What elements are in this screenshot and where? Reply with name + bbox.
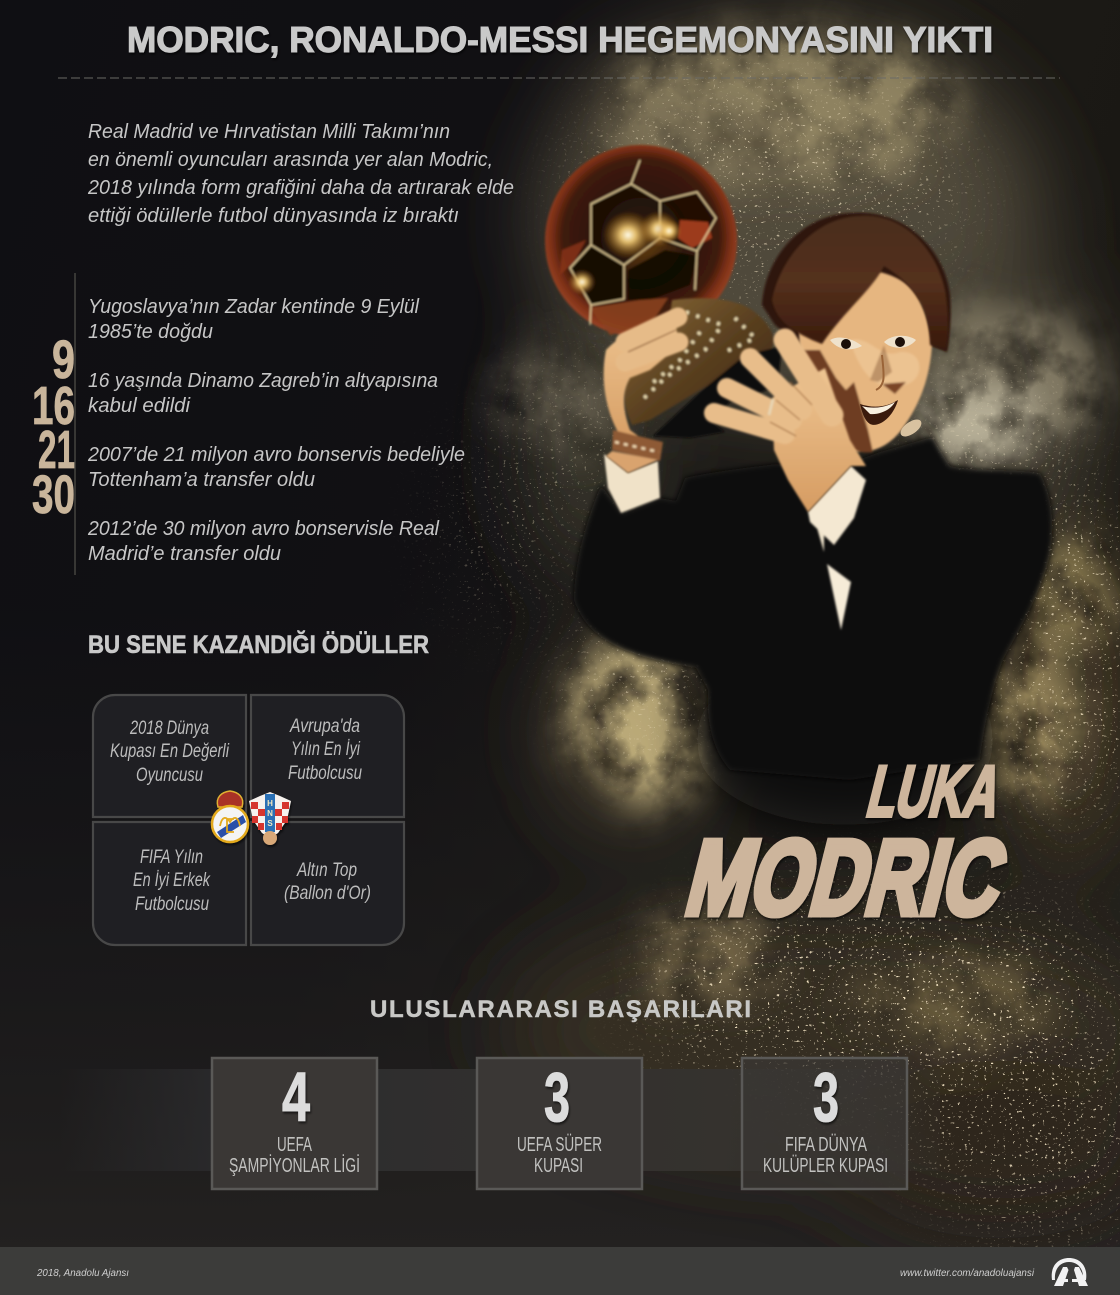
stat: Club World Cup: 3 [813,1058,839,1136]
key numbers: 30 [32,465,75,525]
timeline [32,273,465,575]
twitter url: www.twitter.com/anadoluajansi [900,1268,1035,1279]
award: Europe player of the year: Futbolcusu [288,763,362,784]
stat: Champions League: UEFA [277,1134,312,1156]
stat: Club World Cup [742,1058,907,1189]
title divider [58,77,1060,79]
award: Europe player of the year [251,695,404,817]
shirt and cuff [604,454,866,630]
eyes and mouth [830,336,916,425]
timeline text: 2012’de 30 milyon avro bonservisle Real [87,518,440,540]
icon: Real Madrid crest [212,791,248,842]
photo: Luka Modric holding Ballon d'Or [545,145,1052,825]
icon: Croatia federation crest: S [267,819,273,828]
stat: Super Cup [477,1058,642,1189]
stat: Super Cup: UEFA SÜPER [517,1134,602,1156]
timeline text [87,296,465,565]
timeline text: 1985’te doğdu [88,321,213,343]
raised hand [714,340,866,512]
award: world cup MVP [93,695,246,817]
icon: Croatia federation crest: H [267,799,273,808]
award: FIFA best player: FIFA Yılın [140,847,203,868]
achievements band [60,1069,940,1171]
award: Europe player of the year: Yılın En İyi [291,739,361,760]
trophy ball [545,145,737,337]
stat: Champions League [212,1058,377,1189]
smoke clouds [500,40,1115,1045]
award: world cup MVP: 2018 Dünya [129,718,209,739]
footer bar [0,1247,1120,1295]
award: Ballon d'Or [251,822,404,945]
timeline text: 16 yaşında Dinamo Zagreb’in altyapısına [88,370,438,392]
award: Ballon d'Or: Altın Top [296,860,357,881]
intro text: Real Madrid ve Hırvatistan Milli Takımı’nın [88,121,450,143]
icon: Anadolu Agency logo [1052,1258,1088,1286]
key numbers: 16 [32,376,75,436]
award: FIFA best player: En İyi Erkek [133,870,211,891]
award: Europe player of the year: Avrupa'da [289,716,360,737]
intro text: en önemli oyuncuları arasında yer alan Modric, [88,149,493,171]
heading: international achievements: ULUSLARARASI BAŞARILARI [370,996,751,1023]
intro text: ettiği ödüllerle futbol dünyasında iz bıraktı [88,205,459,227]
stat: Club World Cup: FIFA DÜNYA [785,1134,867,1156]
hair back [762,213,951,352]
award: FIFA best player: Futbolcusu [135,894,209,915]
timeline text: Tottenham’a transfer oldu [88,469,315,491]
face [799,272,932,452]
name: Luka Modric [676,752,1018,937]
earpiece mic [898,416,924,440]
award: Ballon d'Or: (Ballon d'Or) [284,883,371,904]
heading: awards: BU SENE KAZANDIĞI ÖDÜLLER [88,630,429,659]
intro text: 2018 yılında form grafiğini daha da artırarak elde [87,177,514,199]
key numbers [32,330,75,525]
award: world cup MVP: Kupası En Değerli [110,741,230,762]
award: FIFA best player [93,822,246,945]
key numbers: 21 [38,420,75,480]
title: MODRIC, RONALDO-MESSI HEGEMONYASINI YIKTI [127,19,993,60]
holding hand and wrist [604,310,680,473]
timeline text: kabul edildi [88,395,191,417]
award: world cup MVP: Oyuncusu [136,765,203,786]
icon: Croatia federation crest: N [267,809,273,818]
stat: Champions League: ŞAMPİYONLAR LİGİ [229,1154,360,1177]
stat: Super Cup: KUPASI [534,1155,583,1177]
icon: Croatia federation crest [249,792,291,845]
stat: Champions League: 4 [282,1058,310,1136]
gold dust speckles [406,30,1120,1247]
source credit: 2018, Anadolu Ajansı [36,1268,129,1279]
timeline text: Madrid’e transfer oldu [88,543,281,565]
trophy base [624,298,782,438]
key numbers: 9 [52,330,75,390]
hair front [772,216,948,350]
timeline text: Yugoslavya’nın Zadar kentinde 9 Eylül [88,296,420,318]
name: Luka Modric: LUKA [860,752,1010,832]
intro text [87,121,514,227]
stat: Club World Cup: KULÜPLER KUPASI [763,1155,888,1177]
suit [574,437,1052,825]
timeline text: 2007’de 21 milyon avro bonservis bedeliyle [87,444,465,466]
stat: Super Cup: 3 [544,1058,570,1136]
panel: awards grid [93,695,404,945]
